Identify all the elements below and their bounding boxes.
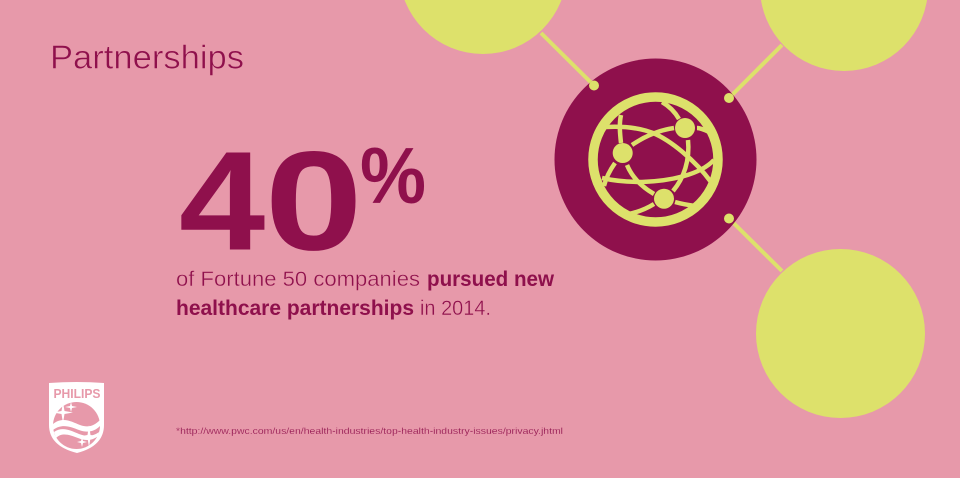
node: top-left circle: [399, 0, 567, 54]
node: top-right circle: [760, 0, 928, 71]
statistic description: pursued new: [427, 268, 555, 291]
statistic description: healthcare partnerships: [176, 297, 414, 320]
Philips logo: [49, 382, 104, 453]
icon: network globe: [593, 97, 718, 222]
title: Partnerships: [50, 40, 244, 76]
node: bottom-right circle: [756, 249, 925, 418]
statistic description: of Fortune 50 companies: [176, 268, 420, 291]
connector dots: [589, 80, 734, 224]
big statistic: 40%: 0: [265, 122, 363, 280]
statistic description: in 2014.: [420, 297, 491, 320]
central hub circle: [554, 58, 756, 260]
big statistic: 40%: 4: [179, 123, 265, 280]
big statistic: 40%: %: [360, 131, 426, 220]
big statistic: 40%: [179, 122, 426, 280]
connector lines: [541, 33, 782, 271]
statistic description: [176, 268, 555, 320]
Philips logo: PHILIPS: [54, 387, 100, 401]
source footnote: *http://www.pwc.com/us/en/health-industries/top-health-industry-issues/privacy.jhtml: [176, 426, 563, 437]
